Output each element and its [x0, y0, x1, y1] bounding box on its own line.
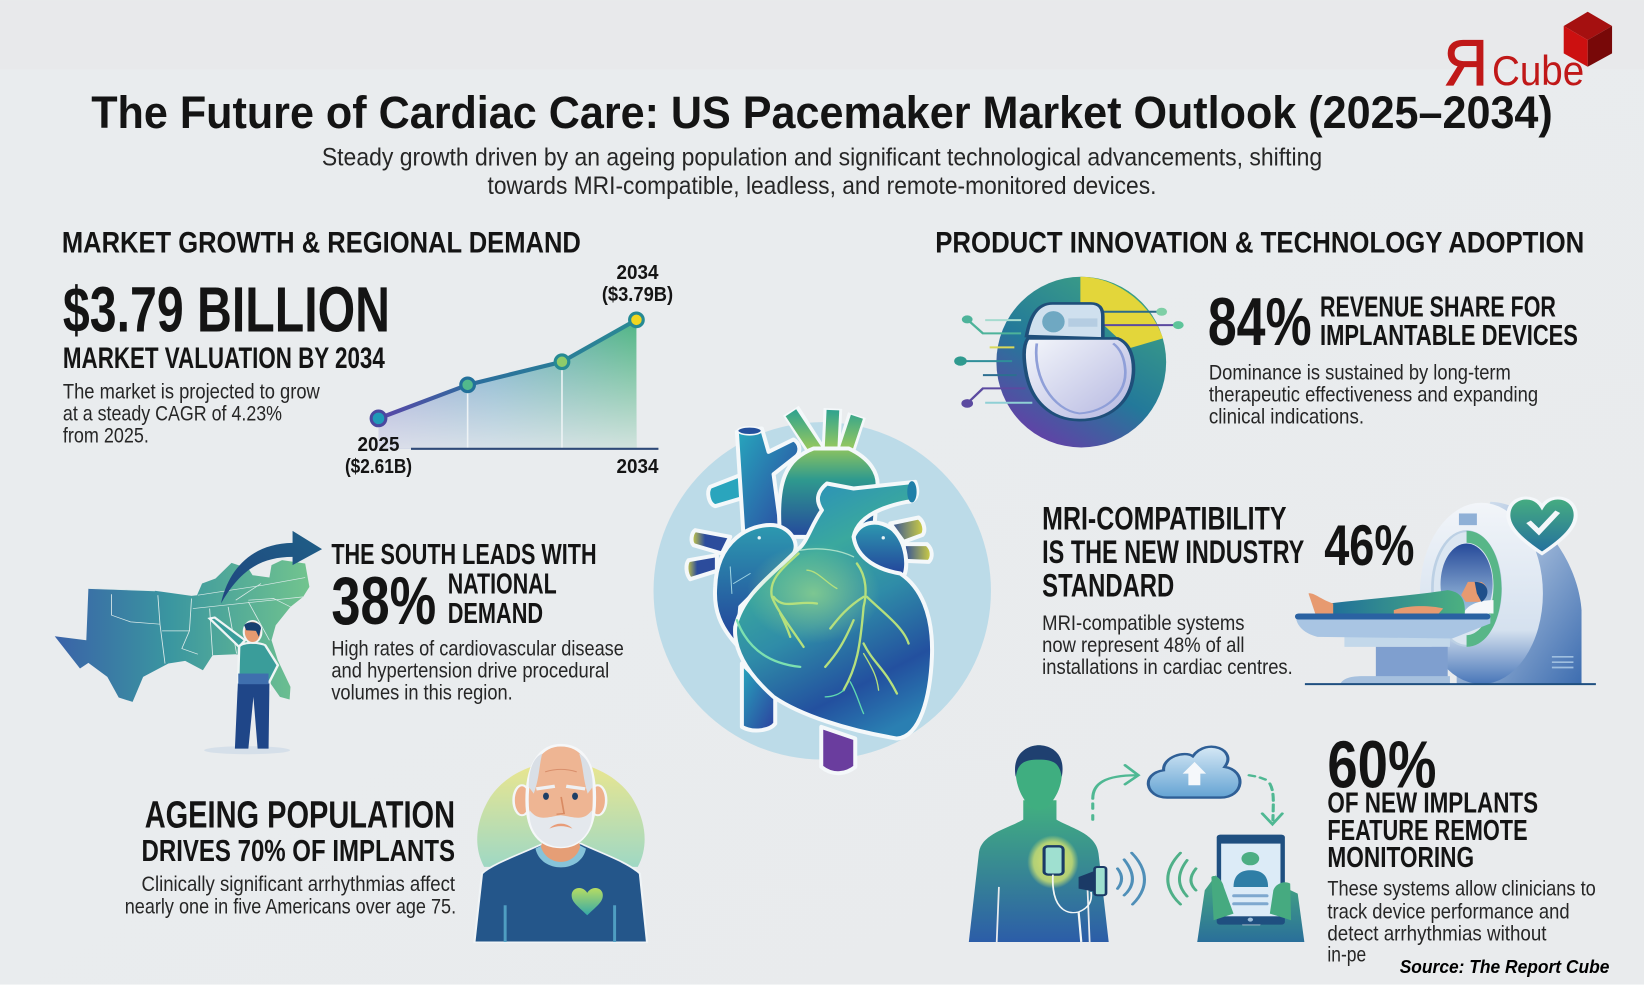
panel: implantable devices: clinical indications.: [1209, 406, 1364, 429]
tablet in hands: [1197, 835, 1304, 942]
illustration: central heart: [654, 408, 991, 773]
subtitle: [322, 144, 1322, 200]
description: The market is projected to grow: [63, 380, 321, 403]
illustration: MRI scanner: [1295, 498, 1596, 684]
panel: south demand: THE SOUTH LEADS WITH: [331, 538, 597, 570]
patient: [969, 745, 1109, 942]
panel: south demand: [331, 538, 624, 704]
map of the south: [55, 560, 309, 702]
panel: remote monitoring: detect arrhythmias without: [1327, 923, 1547, 946]
logo: RCube: [1444, 12, 1612, 99]
panel: remote monitoring: FEATURE REMOTE: [1327, 814, 1528, 846]
lead wires: [954, 308, 1184, 408]
logo: RCube: Cube: [1492, 47, 1584, 94]
heading: market growth: MARKET GROWTH & REGIONAL DEMAND: [62, 227, 581, 260]
stat: 46%: 46%: [1324, 514, 1414, 578]
panel: remote monitoring: OF NEW IMPLANTS: [1327, 787, 1538, 819]
panel: ageing population: DRIVES 70% OF IMPLANTS: [142, 834, 455, 868]
title: The Future of Cardiac Care: US Pacemaker Market Outlook (2025–2034): [91, 87, 1553, 138]
panel: implantable devices: IMPLANTABLE DEVICES: [1320, 319, 1578, 351]
logo: RCube: Я: [1444, 26, 1488, 99]
illustration: elderly man: [474, 745, 647, 942]
panel: south demand: volumes in this region.: [331, 681, 513, 704]
signal waves: [1118, 853, 1196, 904]
panel: MRI compatibility: IS THE NEW INDUSTRY: [1042, 534, 1305, 570]
stat: 84%: 84%: [1208, 284, 1312, 360]
panel: remote monitoring: in-pe: [1327, 943, 1366, 966]
panel: remote monitoring: track device performance and: [1327, 901, 1570, 924]
source credit: Source: The Report Cube: [1400, 956, 1609, 977]
panel: implantable devices: therapeutic effectiveness and expanding: [1209, 384, 1538, 407]
panel: remote monitoring: MONITORING: [1327, 841, 1474, 873]
subtitle: towards MRI-compatible, leadless, and remote-monitored devices.: [488, 172, 1156, 200]
description: [63, 380, 321, 448]
panel: ageing population: [125, 793, 456, 918]
panel: market valuation: [63, 273, 390, 448]
line chart: ($3.79B): [602, 284, 673, 306]
panel: ageing population: nearly one in five Americans over age 75.: [125, 895, 456, 918]
panel: MRI compatibility: now represent 48% of all: [1042, 634, 1245, 657]
panel: south demand: DEMAND: [448, 597, 543, 629]
person pointing: [204, 618, 290, 754]
panel: MRI compatibility: MRI-COMPATIBILITY: [1042, 501, 1287, 537]
panel: remote monitoring: [1327, 727, 1596, 966]
illustration: remote monitoring: [969, 745, 1304, 942]
panel: south demand: NATIONAL: [448, 567, 557, 599]
line chart: 2034: [616, 456, 658, 478]
arrow: [221, 531, 322, 604]
illustration: pacemaker device: [954, 277, 1184, 447]
line chart: 2025: [358, 434, 399, 456]
description: at a steady CAGR of 4.23%: [63, 402, 282, 425]
panel: ageing population: AGEING POPULATION: [145, 793, 455, 835]
line chart: ($2.61B): [345, 456, 412, 478]
anatomical heart: [686, 408, 932, 773]
great vessels: [737, 428, 799, 537]
panel: south demand: and hypertension drive procedural: [331, 659, 609, 682]
stat: 38%: 38%: [331, 563, 436, 639]
stat: 3.79 billion: $3.79 BILLION: [63, 273, 390, 345]
data flow arrows: [1093, 765, 1282, 824]
backdrop circle: [654, 422, 991, 760]
panel: implantable devices: [1208, 284, 1578, 429]
panel: MRI compatibility: STANDARD: [1042, 568, 1174, 604]
illustration: southern US map with person: [55, 531, 322, 754]
subtitle: Steady growth driven by an ageing population and significant technological advancements, shifting: [322, 144, 1322, 172]
stat label: MARKET VALUATION BY 2034: [63, 342, 385, 375]
coronary vessels: [730, 549, 909, 714]
cloud upload: [1148, 747, 1240, 798]
panel: ageing population: Clinically significant arrhythmias affect: [142, 873, 455, 896]
line chart: [345, 262, 673, 478]
panel: implantable devices: REVENUE SHARE FOR: [1320, 291, 1556, 323]
line chart: 2034: [616, 262, 658, 284]
description: from 2025.: [63, 425, 149, 448]
panel: south demand: High rates of cardiovascular disease: [331, 637, 624, 660]
panel: implantable devices: Dominance is sustained by long-term: [1209, 362, 1511, 385]
panel: remote monitoring: These systems allow clinicians to: [1327, 877, 1596, 900]
panel: MRI compatibility: [1042, 501, 1414, 679]
panel: MRI compatibility: MRI-compatible systems: [1042, 612, 1245, 635]
panel: MRI compatibility: installations in cardiac centres.: [1042, 656, 1293, 679]
stat: 60%: 60%: [1327, 727, 1436, 802]
